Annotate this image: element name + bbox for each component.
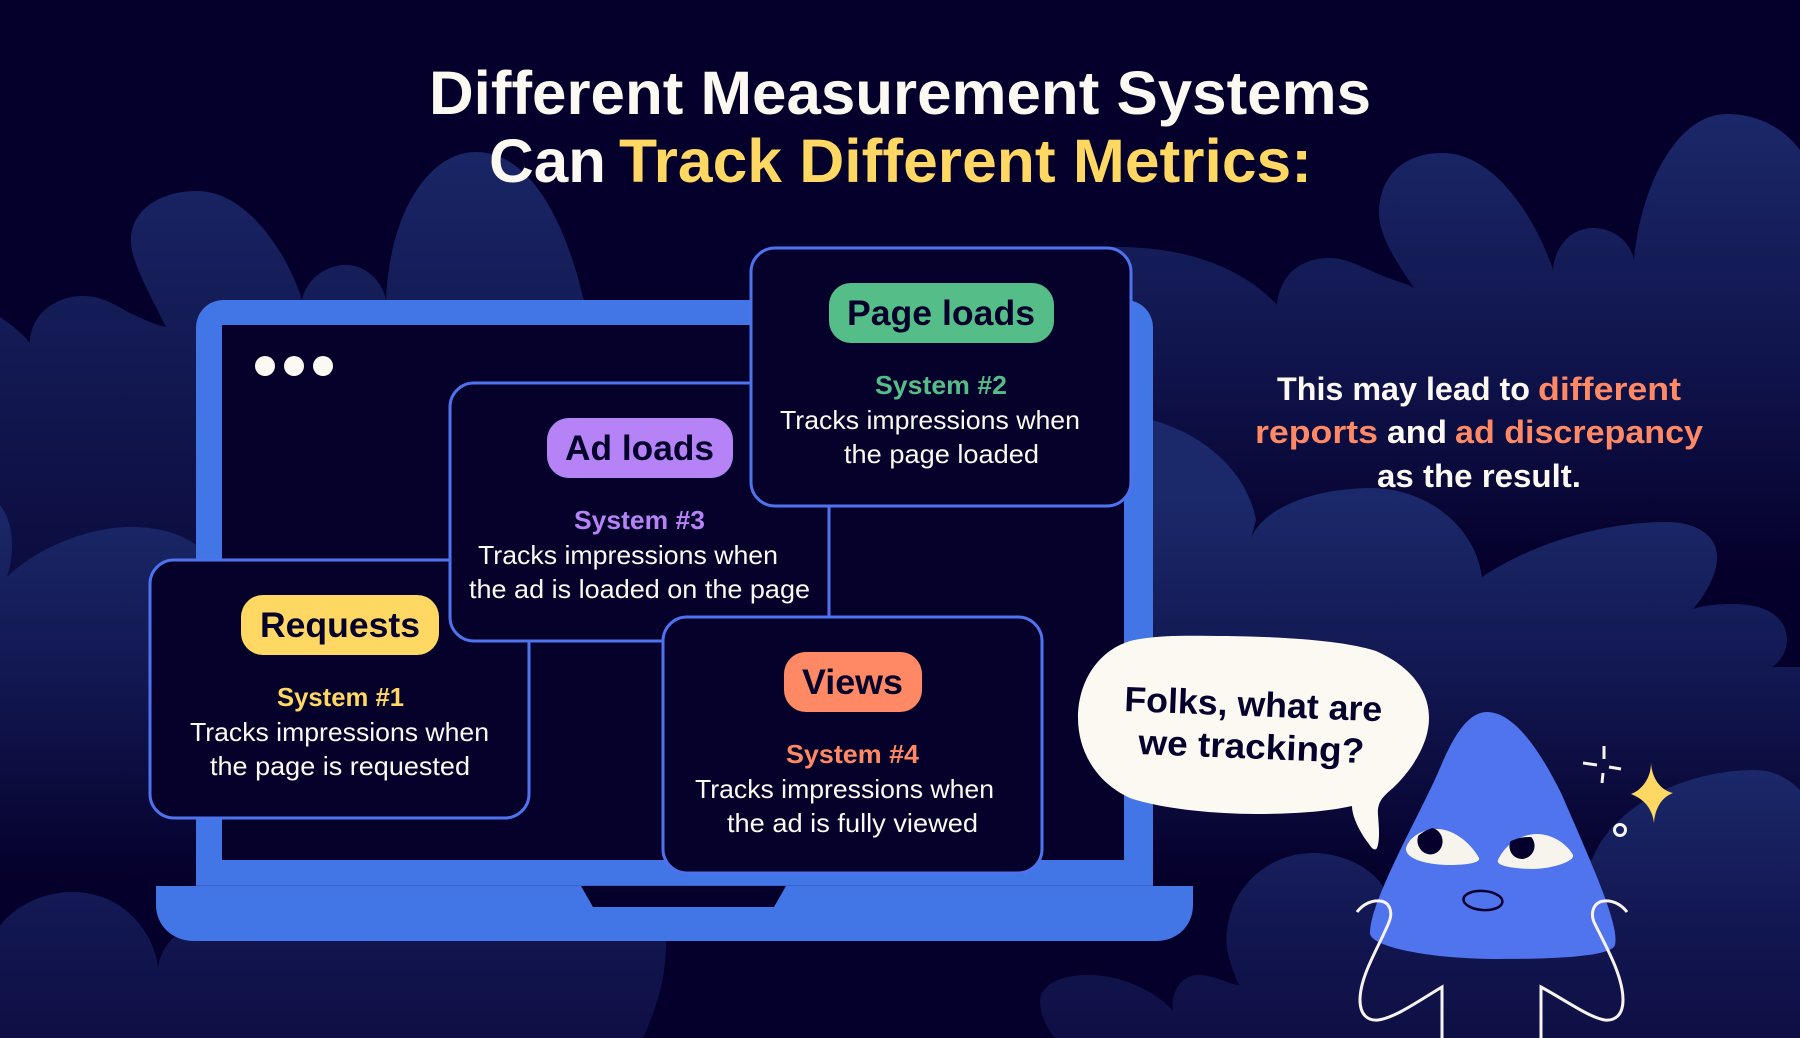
text block: result note: ad discrepancy — [1455, 414, 1703, 450]
text block: result note: as the result. — [1377, 458, 1581, 494]
pill: requests: Requests — [260, 606, 420, 645]
system label 2: System #2 — [875, 370, 1007, 400]
panel: page loads card — [751, 248, 1131, 506]
panel: requests card — [150, 560, 529, 818]
text block: result note: and — [1387, 414, 1447, 450]
left eye — [1406, 825, 1479, 865]
system label 3: System #3 — [574, 505, 705, 535]
description 4 — [695, 774, 994, 838]
description 2 — [780, 405, 1080, 469]
pill: ad loads — [547, 418, 733, 478]
text block: result note: This may lead to — [1277, 371, 1530, 407]
pill: page loads — [829, 283, 1054, 343]
description 2: the page loaded — [844, 439, 1039, 469]
background clouds: middle layer — [0, 413, 1800, 900]
text block: result note — [1255, 371, 1703, 494]
description 1: Tracks impressions when — [190, 717, 489, 747]
description 4: Tracks impressions when — [695, 774, 994, 804]
title: Track Different Metrics: — [619, 127, 1312, 195]
right eye — [1498, 830, 1573, 869]
character — [1357, 712, 1627, 1038]
laptop screen frame — [196, 300, 1153, 886]
icon: small ring — [1614, 824, 1626, 836]
panel: views card — [663, 617, 1042, 873]
system label 4: System #4 — [786, 739, 920, 769]
bubble text: we tracking? — [1137, 723, 1365, 771]
title — [429, 59, 1371, 195]
description 1: the page is requested — [210, 751, 470, 781]
title: Can — [489, 127, 606, 195]
description 3 — [469, 540, 810, 604]
panel: ad loads card — [450, 383, 829, 641]
speech bubble — [1078, 636, 1429, 849]
left arm — [1357, 901, 1442, 1038]
laptop base with notch — [156, 886, 1193, 941]
title: Different Measurement Systems — [429, 59, 1371, 127]
system label 1: System #1 — [277, 682, 404, 712]
icon: yellow sparkle — [1631, 763, 1673, 823]
laptop screen — [222, 325, 1124, 860]
description 4: the ad is fully viewed — [727, 808, 978, 838]
bubble text — [1124, 680, 1383, 771]
pill: requests — [241, 595, 439, 655]
right arm — [1541, 901, 1627, 1038]
description 1 — [190, 717, 489, 781]
text block: result note: reports — [1255, 414, 1378, 450]
window dots — [255, 356, 333, 376]
icon: small white twinkle — [1583, 746, 1621, 783]
laptop — [156, 300, 1193, 941]
character body — [1370, 712, 1616, 959]
background clouds: lower layer — [0, 770, 1800, 1038]
pill: views: Views — [802, 663, 903, 702]
description 2: Tracks impressions when — [780, 405, 1080, 435]
description 3: the ad is loaded on the page — [469, 574, 810, 604]
description 3: Tracks impressions when — [478, 540, 778, 570]
pill: views — [784, 652, 922, 712]
pill: ad loads: Ad loads — [565, 429, 714, 468]
pill: page loads: Page loads — [847, 294, 1035, 333]
mouth — [1463, 890, 1503, 911]
background clouds: upper layer — [0, 114, 1800, 640]
bubble text: Folks, what are — [1124, 680, 1383, 729]
text block: result note: different — [1538, 371, 1681, 407]
